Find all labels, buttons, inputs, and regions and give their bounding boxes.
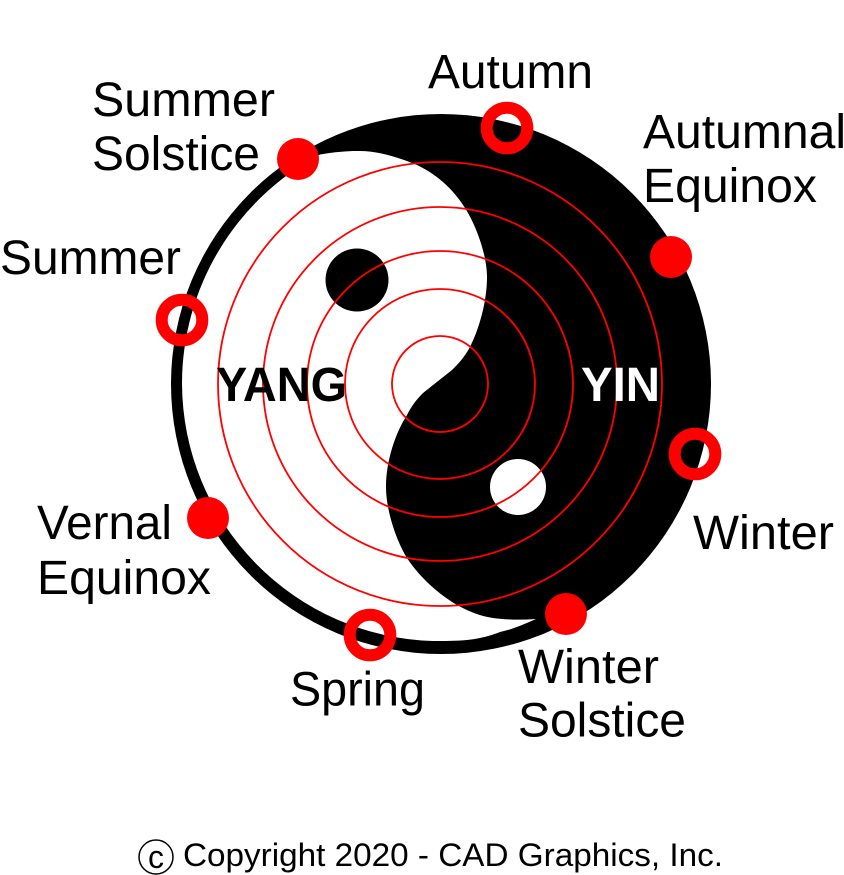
yin yang symbol [171,114,711,654]
season markers [162,108,715,655]
yin label: YIN [581,359,660,412]
season labels: Equinox [37,552,211,605]
season labels: Vernal [37,497,172,550]
red concentric circles [218,162,662,606]
white yang shape [182,151,536,641]
black disc [171,114,711,654]
season labels: Winter [518,641,659,694]
season labels: Summer [0,232,181,285]
light dot [490,459,546,515]
season labels: Winter [693,507,834,560]
copyright line: Copyright 2020 - CAD Graphics, Inc. [183,837,723,873]
season labels: Solstice [92,128,260,181]
season labels: Spring [290,664,425,716]
season labels: Summer [92,74,275,127]
season labels: Autumn [428,46,593,99]
copyright line: c [148,839,164,875]
season labels: Autumnal [643,106,844,159]
season labels: Equinox [643,160,817,213]
season labels: Solstice [518,694,686,748]
dark dot [326,248,388,312]
yang label: YANG [216,359,347,412]
